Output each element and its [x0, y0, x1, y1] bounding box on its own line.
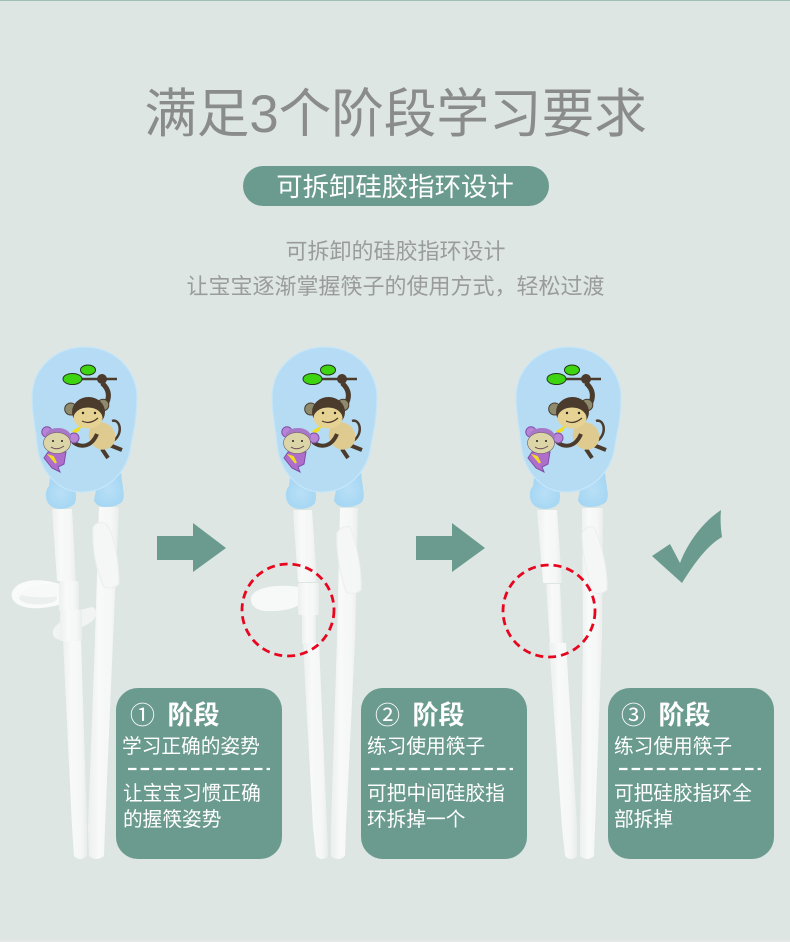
panel: stage 2: 练习使用筷子: [367, 736, 485, 758]
chopsticks stage 2: [251, 347, 377, 859]
panel: stage 1: 学习正确的姿势: [122, 736, 260, 758]
panel: stage 2: 阶段: [412, 700, 465, 730]
panel: stage 3: 练习使用筷子: [614, 736, 732, 758]
description text: [186, 239, 605, 299]
arrow 1: [157, 523, 226, 572]
description text: 让宝宝逐渐掌握筷子的使用方式，轻松过渡: [186, 274, 605, 299]
panel: stage 1: 让宝宝习惯正确: [123, 783, 261, 805]
panel: stage 2: 环拆掉一个: [367, 809, 466, 831]
title: 满足3个阶段学习要求: [144, 85, 647, 144]
panel: stage 3: 部拆掉: [614, 809, 673, 831]
panel: stage 1: [116, 688, 282, 859]
panel: stage 2: ②: [375, 702, 400, 730]
dashed circle 3: [503, 565, 595, 657]
panel: stage 2: 可把中间硅胶指: [367, 783, 505, 805]
panel: stage 1: 的握筷姿势: [123, 809, 221, 831]
panel: stage 3: ③: [621, 702, 646, 730]
panel: stage 3: 可把硅胶指环全: [614, 783, 752, 805]
panel: stage 1: 阶段: [168, 700, 220, 730]
chopsticks stage 3: [516, 347, 621, 859]
check mark: [652, 510, 722, 583]
dashed circle 2: [242, 564, 334, 656]
subtitle pill: [243, 166, 549, 206]
subtitle pill: 可拆卸硅胶指环设计: [276, 172, 514, 202]
panel: stage 2: [361, 688, 527, 859]
description text: 可拆卸的硅胶指环设计: [285, 239, 506, 264]
panel: stage 3: [608, 688, 774, 859]
chopsticks stage 1: [12, 347, 137, 859]
panel: stage 3: 阶段: [658, 700, 711, 730]
panel: stage 1: ①: [130, 702, 155, 730]
arrow 2: [416, 523, 485, 572]
